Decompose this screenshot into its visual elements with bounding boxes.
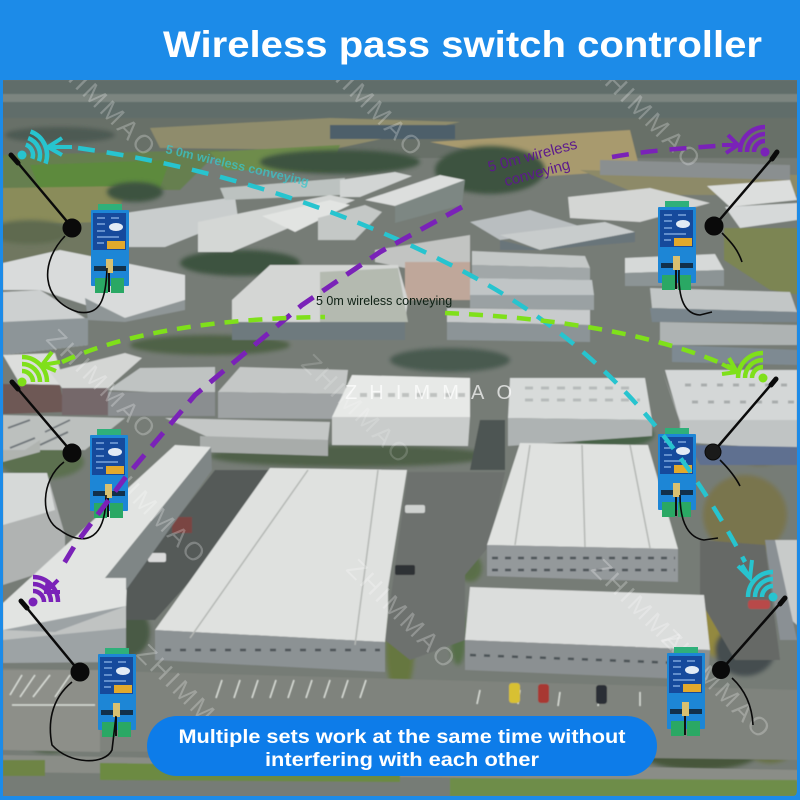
watermark: ZHIMMAO bbox=[345, 382, 515, 404]
green wireless link bbox=[18, 313, 768, 386]
device 1 with antenna bbox=[11, 155, 129, 313]
building: centre right bbox=[487, 443, 678, 582]
horizon and fields bbox=[0, 80, 800, 295]
middle row buildings bbox=[3, 353, 797, 585]
tree bands bbox=[0, 127, 795, 770]
watermark: ZHIMMAO bbox=[41, 41, 164, 164]
title: Wireless pass switch controller bbox=[163, 24, 762, 65]
teal wireless link bbox=[18, 132, 778, 602]
front buildings bbox=[3, 443, 797, 680]
antenna 5 bbox=[21, 601, 116, 761]
watermark: ZHIMMAO bbox=[131, 638, 254, 761]
building: left strip bbox=[3, 445, 212, 663]
callout: interfering with each other bbox=[265, 750, 540, 771]
device unit 4 bbox=[658, 428, 696, 517]
watermark: ZHIMMAO bbox=[91, 448, 214, 571]
antenna 1 bbox=[11, 155, 107, 313]
distance label: centre: 5 0m wireless conveying bbox=[316, 294, 452, 308]
device unit 6 bbox=[667, 647, 705, 736]
building: far right bbox=[765, 540, 797, 640]
purple wireless link bbox=[28, 127, 770, 606]
device 3 with antenna bbox=[12, 382, 128, 539]
antenna 3 bbox=[12, 382, 106, 539]
device unit 3 bbox=[90, 429, 128, 518]
parked cars bbox=[148, 505, 770, 704]
building: right bottom bbox=[465, 587, 710, 680]
callout: Multiple sets work at the same time without bbox=[178, 727, 626, 748]
antenna 2 bbox=[679, 152, 777, 315]
watermark: ZHIMMAO bbox=[308, 41, 431, 164]
antenna 4 bbox=[680, 379, 776, 540]
watermark: ZHIMMAO bbox=[586, 553, 709, 676]
distance label: purple bbox=[486, 136, 584, 193]
watermark: ZHIMMAO bbox=[656, 623, 779, 746]
upper left and centre buildings bbox=[3, 250, 408, 355]
callout bbox=[147, 716, 657, 776]
device 2 with antenna bbox=[658, 152, 777, 315]
device unit 2 bbox=[658, 201, 696, 290]
device unit 1 bbox=[91, 204, 129, 293]
watermark: ZHIMMAO bbox=[296, 348, 419, 471]
building: centre bbox=[155, 468, 407, 672]
watermark: ZHIMMAO bbox=[41, 323, 164, 446]
watermark: ZHIMMAO bbox=[341, 553, 464, 676]
device 5 with antenna bbox=[21, 601, 136, 761]
device 4 with antenna bbox=[658, 379, 776, 540]
far buildings bbox=[125, 160, 797, 365]
parking markings bbox=[10, 675, 640, 706]
distance label: purple: conveying bbox=[502, 156, 572, 190]
dark asphalt yards bbox=[3, 420, 800, 796]
device unit 5 bbox=[98, 648, 136, 737]
device 6 with antenna bbox=[667, 598, 785, 736]
watermark: ZHIMMAO bbox=[586, 53, 709, 176]
distance label: purple: 5 0m wireless bbox=[486, 136, 579, 176]
antenna 6 bbox=[712, 598, 785, 725]
distance label: teal: 5 0m wireless conveying bbox=[164, 142, 310, 189]
